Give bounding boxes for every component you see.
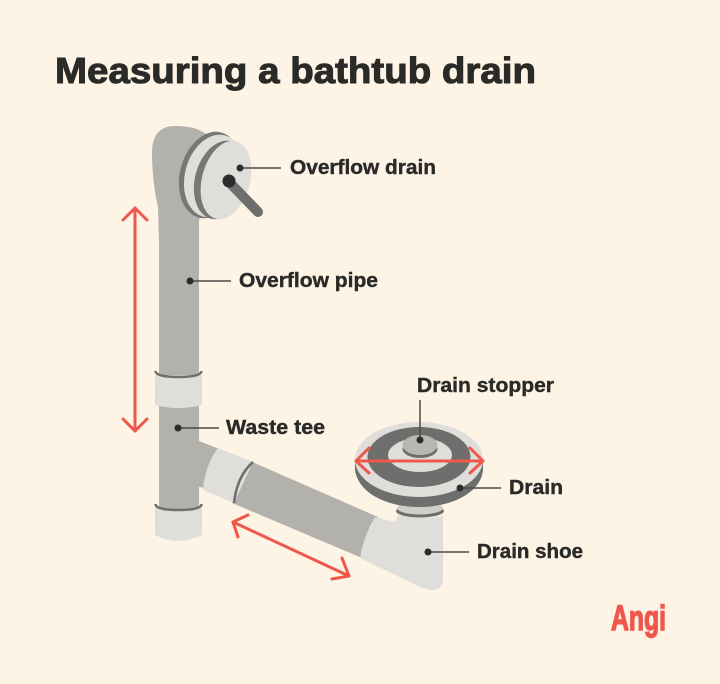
waste tee (159, 405, 222, 510)
overflow pipe (152, 126, 215, 375)
label: Waste tee: Waste tee (226, 417, 325, 439)
red arrow: overflow pipe length (123, 208, 147, 431)
red arrow: drain diameter (356, 448, 483, 473)
label: Drain stopper (416, 375, 554, 444)
drain lever (222, 174, 258, 212)
label: Overflow pipe (186, 270, 378, 292)
lower coupling (155, 504, 202, 541)
red arrow: drain pipe length (233, 515, 349, 579)
drain shoe (360, 515, 443, 590)
drain stopper (402, 435, 438, 458)
upper coupling (155, 371, 202, 408)
label: Overflow pipe: Overflow pipe (239, 270, 378, 292)
angled drain pipe (232, 461, 378, 558)
drain neck (396, 502, 444, 518)
drain (355, 422, 483, 507)
label: Drain stopper: Drain stopper (417, 375, 554, 397)
label: Drain shoe: Drain shoe (477, 541, 583, 563)
label: Drain: Drain (509, 477, 563, 499)
label: Drain shoe (424, 541, 583, 563)
angled pipe coupling (203, 448, 253, 503)
overflow drain (170, 125, 260, 225)
Angi logo: Angi (611, 599, 666, 638)
label: Overflow drain: Overflow drain (290, 157, 436, 179)
label: Drain (456, 477, 563, 499)
label: Waste tee (174, 417, 325, 439)
title: Measuring a bathtub drain (55, 50, 536, 91)
